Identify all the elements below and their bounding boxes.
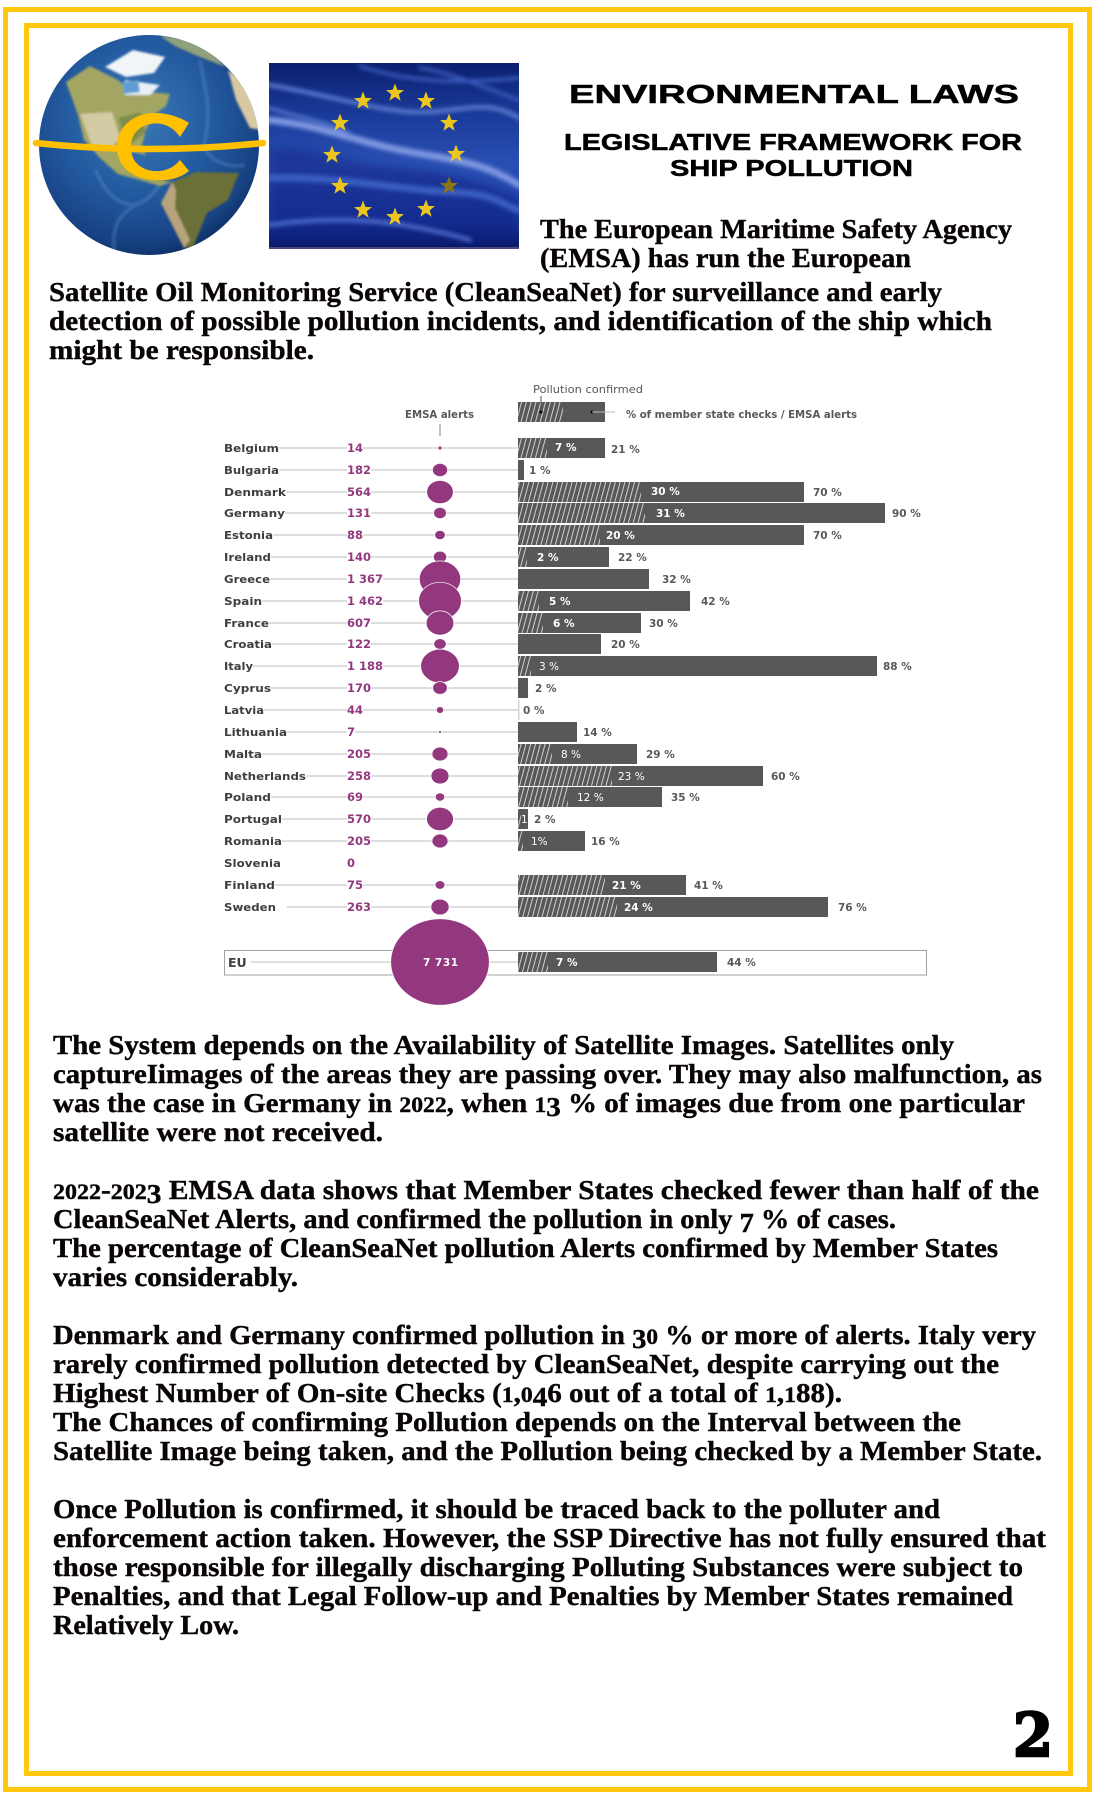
- row: Romania: [224, 831, 620, 851]
- row: Slovenia: 0: [347, 856, 355, 870]
- row: Netherlands: Netherlands: [224, 770, 306, 783]
- row: Malta: 29 %: [646, 749, 675, 761]
- row: Belgium: 21 %: [611, 444, 640, 456]
- row: Slovenia: [224, 856, 355, 870]
- row: Greece: 32 %: [662, 574, 691, 586]
- row: Croatia: Croatia: [224, 638, 272, 651]
- legend: % of member state checks / EMSA alerts: [626, 409, 857, 421]
- row: Portugal: Portugal: [224, 813, 282, 826]
- row: Poland: 69: [347, 790, 363, 804]
- intro text: The European Maritime Safety Agency: [540, 214, 1013, 244]
- row: Romania: 16 %: [591, 836, 620, 848]
- euro ring line: [36, 143, 263, 149]
- row: Latvia: 0 %: [523, 705, 545, 717]
- paragraph: EMSA data: EMSA data shows that Member States checked fewer than half of the: [162, 1175, 1039, 1205]
- row: Germany: 90 %: [892, 508, 921, 520]
- row: Spain: [224, 582, 730, 620]
- paragraph: satellite availability: was the case in Germany in 2022, when 1: [53, 1088, 545, 1118]
- row: Estonia: 88: [347, 528, 363, 542]
- row: Denmark: 70 %: [813, 487, 842, 499]
- row: Germany: Germany: [224, 507, 285, 520]
- row: Estonia: 20 %: [606, 530, 635, 542]
- row: Slovenia: Slovenia: [224, 857, 281, 870]
- row: Italy: 3 %: [539, 661, 559, 673]
- row: Greece: [224, 561, 691, 597]
- intro text: detection of possible pollution incidents, and identification of the ship which: [49, 306, 992, 336]
- row: Romania: 1%: [531, 836, 548, 848]
- paragraph: EMSA data: 2022-202: [53, 1175, 144, 1205]
- row: Denmark: Denmark: [224, 486, 287, 499]
- paragraph: enforcement: enforcement action taken. However, the SSP Directive has not fully ensured that: [53, 1523, 1046, 1553]
- row: France: 30 %: [649, 618, 678, 630]
- legend: [405, 384, 857, 436]
- row: Malta: 205: [347, 747, 371, 761]
- paragraph: Denmark, Germany, Italy: 4: [533, 1382, 547, 1412]
- paragraph: Denmark, Germany, Italy: 0: [646, 1324, 658, 1349]
- row: Portugal: 1: [521, 814, 528, 826]
- row: France: 607: [347, 616, 371, 630]
- paragraph: EMSA data: CleanSeaNet Alerts, and confirmed the pollution in only: [53, 1204, 698, 1234]
- paragraph: Denmark, Germany, Italy: Highest Number of On-site Checks ( 1,0: [53, 1378, 532, 1408]
- paragraph: EMSA data: The percentage of CleanSeaNet pollution Alerts confirmed by Member States: [53, 1233, 998, 1263]
- row: Croatia: [224, 634, 640, 654]
- row: EU total: [224, 919, 926, 1005]
- paragraph: satellite availability: The System depends on the Availability of Satellite Images. Satellites only: [53, 1030, 955, 1060]
- row: Latvia: Latvia: [224, 704, 264, 717]
- intro text: Satellite Oil Monitoring Service (CleanSeaNet) for surveillance and early: [49, 277, 943, 307]
- row: Poland: 12 %: [577, 792, 604, 804]
- row: Cyprus: 170: [347, 681, 371, 695]
- row: Sweden: 263: [347, 900, 371, 914]
- row: Lithuania: 7: [347, 725, 355, 739]
- row: France: France: [224, 617, 269, 630]
- paragraph: Denmark, Germany, Italy: rarely confirmed pollution detected by CleanSeaNet, despite carrying out the: [53, 1349, 999, 1379]
- row: Cyprus: [224, 678, 557, 698]
- row: Belgium: Belgium: [224, 442, 279, 455]
- row: Belgium: [224, 438, 640, 458]
- row: France: [224, 611, 678, 635]
- icon: globe with euro ring: [36, 35, 263, 255]
- row: Portugal: 570: [347, 812, 371, 826]
- paragraph: Denmark, Germany, Italy: Satellite Image being taken, and the Pollution being checked by a Member State.: [53, 1436, 1042, 1466]
- row: Portugal: 2 %: [534, 814, 556, 826]
- row: Poland: [224, 787, 700, 807]
- row: Bulgaria: Bulgaria: [224, 464, 279, 477]
- paragraph: Denmark, Germany, Italy: 6 out of a total of: [547, 1378, 765, 1408]
- row: Ireland: 22 %: [618, 552, 647, 564]
- row: Spain: 5 %: [549, 596, 571, 608]
- row: Poland: Poland: [224, 791, 271, 804]
- row: France: 6 %: [553, 618, 575, 630]
- row: Malta: [224, 744, 675, 764]
- row: Greece: Greece: [224, 573, 270, 586]
- row: Netherlands: 23 %: [618, 771, 645, 783]
- paragraph: satellite availability: 3: [546, 1092, 561, 1122]
- row: Netherlands: 258: [347, 769, 371, 783]
- paragraph: EMSA data: varies considerably.: [53, 1262, 298, 1292]
- legend: EMSA alerts: [405, 409, 474, 421]
- paragraph: EMSA data: [53, 1175, 1039, 1292]
- page number: 2: [1013, 1701, 1053, 1771]
- row: Spain: 42 %: [701, 596, 730, 608]
- row: EU total: 7 %: [556, 957, 578, 969]
- paragraph: EMSA data: 3: [147, 1179, 162, 1209]
- row: Ireland: Ireland: [224, 551, 271, 564]
- row: Cyprus: 2 %: [535, 683, 557, 695]
- paragraph: Denmark, Germany, Italy: The Chances of confirming Pollution depends on the Interval between the: [53, 1407, 961, 1437]
- paragraph: enforcement: Penalties, and that Legal Follow-up and Penalties by Member States remained: [53, 1581, 1013, 1611]
- row: Estonia: 70 %: [813, 530, 842, 542]
- paragraph: Denmark, Germany, Italy: 1,188).: [765, 1378, 839, 1408]
- subtitle: LEGISLATIVE FRAMEWORK FOR: [564, 129, 1022, 155]
- row: Italy: 1 188: [347, 659, 383, 673]
- row: Finland: 41 %: [694, 880, 723, 892]
- subtitle: SHIP POLLUTION: [670, 155, 913, 181]
- row: EU total: EU: [228, 955, 247, 970]
- row: Netherlands: [224, 766, 800, 786]
- chart: EMSA alerts and pollution confirmed by country: [224, 384, 926, 1005]
- row: Latvia: [224, 700, 545, 720]
- row: Ireland: 2 %: [537, 552, 559, 564]
- paragraph: enforcement: Once Pollution is confirmed, it should be traced back to the polluter and: [53, 1494, 940, 1524]
- paragraph: Denmark, Germany, Italy: Denmark and Germany confirmed pollution in: [53, 1320, 594, 1350]
- row: Netherlands: 60 %: [771, 771, 800, 783]
- icon: EU flag: [269, 63, 519, 249]
- row: Malta: 8 %: [561, 749, 581, 761]
- legend: Pollution confirmed: [533, 384, 643, 396]
- row: Croatia: 122: [347, 637, 371, 651]
- row: Spain: 1 462: [347, 594, 383, 608]
- intro text: [49, 214, 1013, 365]
- row: Italy: [224, 649, 912, 683]
- row: Finland: [224, 875, 723, 895]
- paragraph: Denmark, Germany, Italy: [53, 1320, 1042, 1466]
- row: Sweden: Sweden: [224, 901, 276, 914]
- paragraph: EMSA data: % of cases.: [754, 1204, 896, 1234]
- row: Greece: 1 367: [347, 572, 383, 586]
- row: Lithuania: [224, 722, 612, 742]
- row: Romania: 205: [347, 834, 371, 848]
- row: Germany: 131: [347, 506, 371, 520]
- row: Croatia: 20 %: [611, 639, 640, 651]
- row: Estonia: Estonia: [224, 529, 273, 542]
- row: EU total: 7 731: [423, 957, 458, 969]
- row: Spain: Spain: [224, 595, 262, 608]
- row: Belgium: 7 %: [555, 442, 577, 454]
- row: Bulgaria: 182: [347, 463, 371, 477]
- paragraph: Denmark, Germany, Italy: % or more of alerts. Italy very: [665, 1320, 1015, 1350]
- paragraph: enforcement: Relatively Low.: [53, 1610, 239, 1640]
- row: Bulgaria: [224, 460, 551, 480]
- row: Germany: 31 %: [656, 508, 685, 520]
- row: Malta: Malta: [224, 748, 262, 761]
- row: Denmark: 564: [347, 485, 371, 499]
- paragraph: enforcement: [53, 1494, 1046, 1640]
- row: Germany: [224, 503, 921, 523]
- row: Cyprus: Cyprus: [224, 682, 271, 695]
- row: Sweden: 24 %: [624, 902, 653, 914]
- title: ENVIRONMENTAL LAWS: [569, 79, 1019, 109]
- row: Finland: 21 %: [612, 880, 641, 892]
- row: Finland: Finland: [224, 879, 275, 892]
- row: Latvia: 44: [347, 703, 363, 717]
- paragraph: satellite availability: satellite were not received.: [53, 1117, 383, 1147]
- row: EU total: 44 %: [727, 957, 756, 969]
- paragraph: satellite availability: [53, 1030, 1042, 1147]
- euro ring C: [117, 113, 189, 180]
- intro text: (EMSA) has run the European: [540, 243, 911, 273]
- row: Finland: 75: [347, 878, 363, 892]
- row: Denmark: 30 %: [651, 486, 680, 498]
- row: Sweden: [224, 897, 867, 917]
- row: Poland: 35 %: [671, 792, 700, 804]
- intro text: might be responsible.: [49, 335, 314, 365]
- row: Ireland: 140: [347, 550, 371, 564]
- row: Lithuania: Lithuania: [224, 726, 287, 739]
- row: Portugal: [224, 807, 556, 831]
- row: Bulgaria: 1 %: [529, 465, 551, 477]
- row: Romania: Romania: [224, 835, 282, 848]
- paragraph: Denmark, Germany, Italy: 3: [632, 1324, 646, 1354]
- row: Estonia: [224, 525, 842, 545]
- row: Belgium: 14: [347, 441, 363, 455]
- row: Italy: 88 %: [883, 661, 912, 673]
- paragraph: satellite availability: captureIimages of the areas they are passing over. They may also malfunction, as: [53, 1059, 1042, 1089]
- row: Italy: Italy: [224, 660, 253, 673]
- row: Lithuania: 14 %: [583, 727, 612, 739]
- row: Denmark: [224, 480, 842, 504]
- row: Ireland: [224, 547, 647, 567]
- paragraph: satellite availability: % of images due from one particular: [561, 1088, 1025, 1118]
- row: Sweden: 76 %: [838, 902, 867, 914]
- paragraph: EMSA data: 7: [740, 1208, 754, 1238]
- paragraph: enforcement: those responsible for illegally discharging Polluting Substances were subject to: [53, 1552, 1023, 1582]
- subtitle: [564, 129, 1022, 181]
